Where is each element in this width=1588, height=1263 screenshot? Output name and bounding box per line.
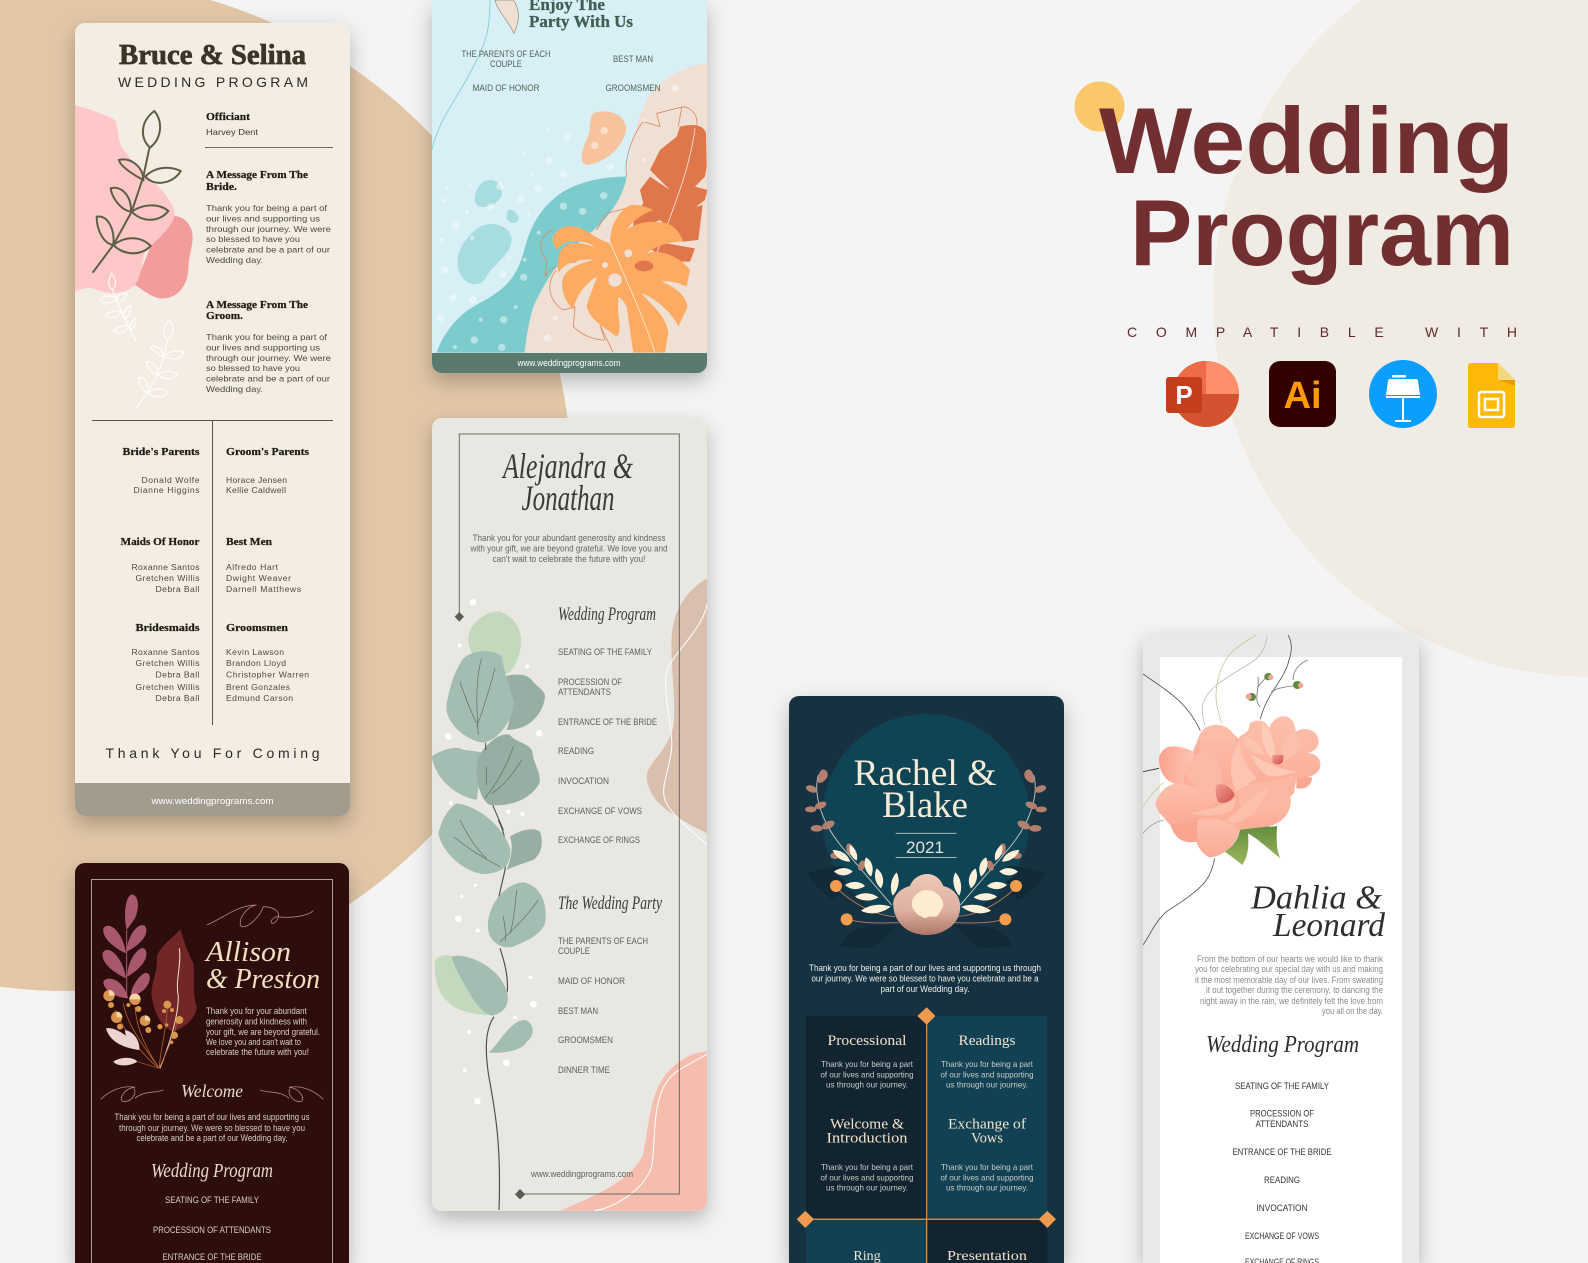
- heading: couple names: Rachel &: [854, 753, 997, 794]
- grid cell: welcome and introduction: us through our journey.: [826, 1183, 908, 1193]
- heading: couple names: [502, 446, 633, 518]
- schedule list: PROCESSION OF: [1250, 1108, 1314, 1118]
- grid cell: processional: us through our journey.: [826, 1080, 908, 1090]
- schedule list: [558, 604, 657, 845]
- flourishes: [101, 905, 323, 1102]
- message from the bride: A Message From The: [206, 169, 308, 181]
- icon: Google Slides: [1468, 363, 1515, 428]
- grid cell: welcome and introduction: [820, 1117, 914, 1193]
- schedule list: ENTRANCE OF THE BRIDE: [162, 1252, 262, 1262]
- party roles: THE PARENTS OF EACH: [462, 49, 550, 59]
- program heading: Wedding Program: [1206, 1032, 1359, 1058]
- message from the bride: Bride.: [206, 181, 237, 193]
- party roles: MAID OF HONOR: [472, 83, 540, 93]
- grid cell: welcome and introduction: Introduction: [826, 1130, 908, 1146]
- party roles: [462, 49, 660, 93]
- thank you text: Thank you for your abundant generosity and kindness: [472, 533, 666, 543]
- schedule list: Wedding Program: [558, 604, 656, 625]
- teal arch: [822, 714, 1030, 922]
- message from the groom: Thank you for being a part of: [206, 332, 328, 342]
- panel: tropical party program: [432, 0, 707, 373]
- heading: enjoy the party: [529, 0, 633, 31]
- grid cell: readings: us through our journey.: [946, 1080, 1028, 1090]
- thank you text: Thank you for your abundant: [206, 1006, 307, 1016]
- message from the bride: celebrate and be a part of our: [206, 244, 330, 254]
- thank you text: generosity and kindness with: [206, 1016, 307, 1026]
- schedule list: SEATING OF THE FAMILY: [1235, 1081, 1329, 1091]
- subheading: WEDDING PROGRAM: [118, 74, 308, 90]
- wedding party right column: Horace Jensen: [226, 475, 287, 485]
- message from the bride: Wedding day.: [206, 255, 263, 265]
- grid cell: exchange of vows: Thank you for being a part: [941, 1162, 1034, 1172]
- welcome heading: Welcome: [181, 1081, 243, 1101]
- officiant block: [205, 111, 333, 148]
- message from the groom: [206, 299, 331, 394]
- wedding party right column: Groom's Parents: [226, 446, 310, 458]
- heading: couple names: Jonathan: [522, 478, 614, 518]
- thank you text: can't wait to celebrate the future with you!: [492, 554, 646, 564]
- panel: Dahlia and Leonard program: [1142, 634, 1419, 1263]
- schedule list: Wedding Program: [151, 1160, 273, 1182]
- grid cell: readings: Readings: [958, 1033, 1016, 1049]
- party list: DINNER TIME: [558, 1065, 610, 1075]
- welcome text: [114, 1112, 310, 1143]
- party list: The Wedding Party: [558, 893, 662, 914]
- panel: Alejandra and Jonathan program: [432, 418, 707, 1211]
- title: Wedding: [1099, 88, 1514, 193]
- wedding party left column: Roxanne Santos: [132, 647, 200, 657]
- panel: Bruce and Selina program: [75, 23, 350, 816]
- icon: Keynote: [1369, 360, 1437, 428]
- icon: Illustrator: [1269, 361, 1336, 427]
- schedule list: READING: [558, 746, 594, 756]
- thank you text: it the most memorable day of our lives. From sweating: [1195, 975, 1383, 985]
- party roles: BEST MAN: [613, 54, 653, 64]
- icon: PowerPoint: [1166, 361, 1239, 427]
- wedding party left column: Debra Ball: [156, 670, 200, 680]
- party list: THE PARENTS OF EACH: [558, 936, 648, 946]
- schedule list: SEATING OF THE FAMILY: [558, 647, 652, 657]
- schedule list: EXCHANGE OF RINGS: [558, 835, 640, 845]
- wedding party right column: Best Men: [226, 536, 272, 548]
- compatible with label: COMPATIBLE WITH: [1127, 324, 1517, 340]
- message from the bride: so blessed to have you: [206, 234, 300, 244]
- message from the groom: so blessed to have you: [206, 363, 300, 373]
- message from the groom: celebrate and be a part of our: [206, 374, 330, 384]
- welcome text: Thank you for being a part of our lives and supporting us: [114, 1112, 310, 1122]
- message from the bride: through our journey. We were: [206, 224, 331, 234]
- title: Program: [1130, 180, 1514, 285]
- wedding party right column: Dwight Weaver: [226, 573, 291, 583]
- thank you text: with your gift, we are beyond grateful. We love you and: [470, 544, 668, 554]
- wedding party left column: Debra Ball: [156, 584, 200, 594]
- schedule grid panels: [806, 1016, 926, 1219]
- floral art: eucalyptus and blobs: [432, 434, 707, 1211]
- icon: PowerPoint: P: [1175, 380, 1193, 410]
- grid cell: readings: of our lives and supporting: [940, 1069, 1034, 1079]
- wedding party left column: Bride's Parents: [122, 446, 200, 458]
- heading: couple names: Dahlia &: [1250, 880, 1383, 916]
- grid cell: exchange of vows: Vows: [971, 1130, 1003, 1146]
- schedule list: ENTRANCE OF THE BRIDE: [558, 717, 657, 727]
- thank you text: your gift, we are beyond grateful.: [206, 1027, 320, 1037]
- party roles: GROOMSMEN: [606, 83, 660, 93]
- heading: couple names: [854, 753, 997, 826]
- footer url: www.weddingprograms.com: [517, 358, 620, 368]
- thank you text: We love you and can't wait to: [206, 1037, 301, 1047]
- grid cell: welcome and introduction: of our lives and supporting: [820, 1172, 914, 1182]
- background circle: tan: [0, 0, 572, 991]
- message from the groom: our lives and supporting us: [206, 342, 320, 352]
- white inner page: [1160, 657, 1402, 1263]
- heading: couple names: [1250, 880, 1386, 944]
- grid cell: processional: Thank you for being a part: [821, 1059, 914, 1069]
- thank you text: [206, 1006, 320, 1057]
- schedule list: EXCHANGE OF VOWS: [1245, 1231, 1319, 1241]
- message from the bride: Thank you for being a part of: [206, 203, 328, 213]
- schedule list: INVOCATION: [558, 776, 609, 786]
- wedding party left column: Gretchen Willis: [136, 573, 200, 583]
- schedule list: SEATING OF THE FAMILY: [165, 1195, 259, 1205]
- message from the bride: [206, 169, 331, 265]
- message from the groom: A Message From The: [206, 299, 308, 311]
- floral wreath: [805, 769, 1047, 948]
- grid cell: processional: Processional: [828, 1033, 906, 1049]
- wedding party right column: Edmund Carson: [226, 693, 293, 703]
- wedding party left column: Roxanne Santos: [132, 562, 200, 572]
- message from the groom: Wedding day.: [206, 384, 263, 394]
- schedule list: [1232, 1081, 1332, 1263]
- wedding party left column: Debra Ball: [156, 693, 200, 703]
- wedding party right column: Kevin Lawson: [226, 647, 284, 657]
- panel: Rachel and Blake program: [789, 696, 1064, 1263]
- message from the bride: our lives and supporting us: [206, 214, 320, 224]
- message from the groom: through our journey. We were: [206, 353, 331, 363]
- title: [1099, 88, 1514, 285]
- thank you text: you for celebrating our special day with us and making: [1195, 964, 1383, 974]
- wedding party left column: [120, 446, 200, 703]
- thank you text: part of our Wedding day.: [880, 984, 970, 994]
- wedding party right column: Brandon Lloyd: [226, 658, 286, 668]
- wedding party right column: Darnell Matthews: [226, 584, 301, 594]
- wedding party right column: Kellie Caldwell: [226, 485, 286, 495]
- heading: couple names: Alejandra &: [502, 446, 633, 486]
- wedding party left column: Bridesmaids: [136, 622, 200, 634]
- schedule list: INVOCATION: [1256, 1203, 1308, 1213]
- grid cell: exchange of vows: [940, 1117, 1034, 1193]
- frame border: [92, 880, 332, 1263]
- welcome text: through our journey. We were so blessed to have you: [119, 1123, 305, 1133]
- grid cell: welcome and introduction: Thank you for being a part: [821, 1162, 914, 1172]
- heading: couple names: Blake: [882, 785, 968, 826]
- thank you text: you all on the day.: [1322, 1006, 1383, 1016]
- wedding party left column: Maids Of Honor: [120, 536, 200, 548]
- grid cell: readings: Thank you for being a part: [941, 1059, 1034, 1069]
- party list: GROOMSMEN: [558, 1035, 613, 1045]
- wedding party right column: [226, 446, 310, 703]
- welcome text: celebrate and be a part of our Wedding day.: [136, 1133, 288, 1143]
- grid cell: welcome and introduction: Welcome &: [830, 1117, 904, 1133]
- schedule list: PROCESSION OF: [558, 677, 622, 687]
- icon: Illustrator: Ai: [1284, 375, 1322, 417]
- floral art: plum leaves and berries: [101, 894, 323, 1102]
- thank you text: [809, 963, 1041, 994]
- closing line: Thank You For Coming: [106, 745, 320, 761]
- schedule list: PROCESSION OF ATTENDANTS: [153, 1225, 271, 1235]
- panel: Allison and Preston program: [75, 863, 349, 1263]
- thank you text: night away in the rain, we definitely felt the love from: [1200, 996, 1383, 1006]
- floral art: tropical leaves and blobs: [432, 0, 707, 353]
- year: 2021: [906, 838, 944, 857]
- grid cell: readings: [940, 1033, 1034, 1090]
- heading: couple names: Bruce & Selina: [119, 40, 306, 71]
- grid cell: exchange of vows: of our lives and supporting: [940, 1172, 1034, 1182]
- party list: MAID OF HONOR: [558, 976, 625, 986]
- heading: couple names: & Preston: [206, 964, 320, 995]
- party list: [558, 893, 662, 1075]
- wedding party right column: Alfredo Hart: [226, 562, 279, 572]
- schedule list: ATTENDANTS: [558, 687, 611, 697]
- party list: BEST MAN: [558, 1006, 598, 1016]
- heading: couple names: Allison: [204, 937, 291, 968]
- wedding party right column: Groomsmen: [226, 622, 288, 634]
- party list: COUPLE: [558, 946, 590, 956]
- footer url: www.weddingprograms.com: [150, 796, 274, 807]
- wedding party left column: Donald Wolfe: [142, 475, 200, 485]
- thank you text: Thank you for being a part of our lives and supporting us through: [809, 963, 1041, 973]
- officiant block: Harvey Dent: [206, 127, 259, 137]
- accent circle behind title: [1074, 82, 1124, 132]
- wedding party left column: Gretchen Willis: [136, 682, 200, 692]
- party roles: COUPLE: [490, 59, 522, 69]
- grid cell: processional: [820, 1033, 914, 1090]
- wedding party left column: Gretchen Willis: [136, 658, 200, 668]
- schedule list: READING: [1264, 1175, 1300, 1185]
- thank you text: celebrate the future with you!: [206, 1047, 309, 1057]
- grid cell: processional: of our lives and supporting: [820, 1069, 914, 1079]
- heading: couple names: [204, 937, 320, 995]
- schedule list: EXCHANGE OF VOWS: [558, 806, 642, 816]
- thank you text: it out together during the ceremony, to dancing the: [1206, 985, 1383, 995]
- floral art: peach flowers: [1142, 635, 1320, 946]
- thank you text: [470, 533, 668, 564]
- thank you text: From the bottom of our hearts we would like to thank: [1197, 954, 1383, 964]
- footer bar: [432, 353, 707, 373]
- schedule list: [151, 1160, 273, 1262]
- background circle: cream: [1213, 0, 1588, 677]
- grid cell: exchange of vows: Exchange of: [948, 1117, 1026, 1133]
- thank you text: our journey. We were so blessed to have you celebrate and be a: [812, 974, 1038, 984]
- heading: enjoy the party: Party With Us: [529, 12, 633, 31]
- message from the groom: Groom.: [206, 310, 243, 322]
- schedule list: ATTENDANTS: [1256, 1119, 1308, 1129]
- wedding party left column: Dianne Higgins: [134, 485, 200, 495]
- grid cell: exchange of vows: us through our journey.: [946, 1183, 1028, 1193]
- footer bar: [75, 783, 350, 816]
- thank you text: [1195, 954, 1383, 1016]
- wedding party right column: Christopher Warren: [226, 670, 309, 680]
- schedule list: ENTRANCE OF THE BRIDE: [1232, 1147, 1332, 1157]
- heading: couple names: Leonard: [1272, 907, 1386, 944]
- officiant block: Officiant: [206, 111, 250, 123]
- floral art: pink blobs and branch: [75, 105, 193, 408]
- footer url: www.weddingprograms.com: [530, 1169, 633, 1179]
- wedding party right column: Brent Gonzales: [226, 682, 290, 692]
